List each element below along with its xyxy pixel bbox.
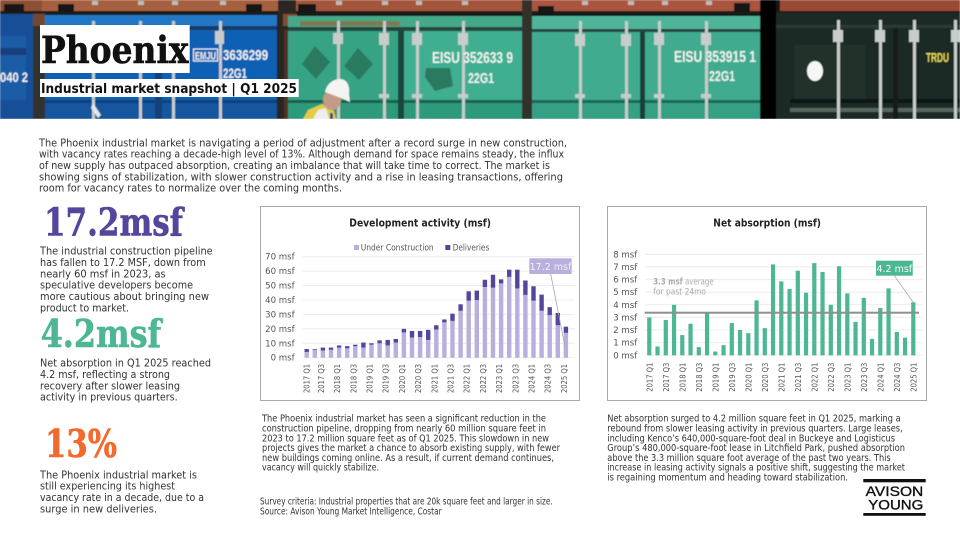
x axis labels: net absorption: 2018 Q1 <box>678 363 687 392</box>
panel: development activity chart <box>260 206 580 400</box>
banner photo: shipping containers: EISU 352633 9 <box>432 50 513 67</box>
banner photo: shipping containers: EISU 353915 1 <box>674 49 756 66</box>
x axis labels: net absorption: 2021 Q1 <box>777 363 786 392</box>
legend: under construction and deliveries: Deliveries <box>453 244 490 254</box>
logo: Avison Young <box>863 479 926 516</box>
x axis labels: net absorption: 2020 Q3 <box>761 363 770 392</box>
annotation: average for past 24mo <box>653 277 714 297</box>
bars: net absorption <box>647 263 915 355</box>
stat: 13%: still experiencing its highest <box>40 480 175 492</box>
callout: 17.2 msf <box>529 258 572 347</box>
x axis labels: net absorption: 2022 Q1 <box>810 363 819 392</box>
text block: net absorption commentary: Group’s 480,000-square-foot lease in Litchfield Park, pushed absorption <box>607 443 905 454</box>
y axis labels: development: 40 msf <box>265 296 296 306</box>
chart title: development activity: Development activity (msf) <box>349 218 491 230</box>
y axis labels: net absorption: 8 msf <box>613 250 638 260</box>
stat: 17.2msf: The industrial construction pipeline <box>39 246 213 258</box>
callout: 4.2 msf: 4.2 msf <box>876 264 913 275</box>
banner photo: shipping containers: 22G1 <box>709 68 735 85</box>
x axis labels: net absorption: 2025 Q1 <box>909 363 918 392</box>
stat: 4.2msf: Net absorption in Q1 2025 reached <box>40 358 211 370</box>
y axis labels: development: 0 msf <box>271 354 296 364</box>
stat: 17.2msf: more cautious about bringing new <box>40 291 209 303</box>
legend: under construction and deliveries: Under Construction <box>361 244 434 254</box>
text block: survey criteria and source: Survey criteria: Industrial properties that are 20k square feet and larger in size. <box>260 496 553 507</box>
intro paragraph: with vacancy rates reaching a decade-high level of 13%. Although demand for space remains steady, the influx <box>39 149 564 161</box>
stat: 4.2msf: activity in previous quarters. <box>40 392 178 404</box>
text block: net absorption commentary: rebound from slower leasing activity in previous quarters. Large leases, <box>607 424 903 434</box>
text block: net absorption commentary: including Kenco’s 640,000-square-foot deal in Buckeye and Logisticus <box>607 433 895 444</box>
x axis labels: development: 2017 Q3 <box>317 364 326 393</box>
stat: 4.2msf: recovery after slower leasing <box>40 380 180 392</box>
text block: survey criteria and source <box>260 496 553 517</box>
y axis labels: development <box>265 253 296 364</box>
y axis labels: development: 10 msf <box>265 339 296 349</box>
x axis labels: net absorption: 2021 Q3 <box>794 363 803 392</box>
intro paragraph: The Phoenix industrial market is navigating a period of adjustment after a record surge in new construction, <box>38 138 567 150</box>
text block: net absorption commentary <box>607 414 905 483</box>
stat: 13%: 13% <box>45 421 117 466</box>
annotation: average for past 24mo: for past 24mo <box>653 287 706 297</box>
x axis labels: development: 2021 Q3 <box>446 364 456 393</box>
text block: development commentary: new buildings coming online. As a result, if current demand continues, <box>262 453 554 464</box>
text block: development commentary <box>261 414 560 474</box>
x axis labels: development: 2023 Q1 <box>495 364 504 393</box>
logo: Avison Young: AVISON <box>866 483 923 499</box>
x axis labels: net absorption: 2023 Q3 <box>860 363 869 392</box>
stat: 13% <box>39 421 204 515</box>
x axis labels: development: 2023 Q3 <box>511 364 520 393</box>
y axis labels: net absorption <box>613 250 638 361</box>
stat: 17.2msf: product to market. <box>40 302 129 314</box>
intro paragraph: room for vacancy rates to normalize over the coming months. <box>39 183 342 195</box>
text block: development commentary: The Phoenix industrial market has seen a significant reduction in the <box>261 414 546 425</box>
x axis labels: net absorption: 2019 Q1 <box>711 363 720 392</box>
y axis labels: net absorption: 0 msf <box>613 351 638 361</box>
y axis labels: net absorption: 1 msf <box>613 339 638 349</box>
x axis labels: development: 2020 Q1 <box>398 364 407 393</box>
text block: survey criteria and source: Source: Avison Young Market Intelligence, Costar <box>260 506 442 517</box>
x axis labels: development: 2024 Q1 <box>528 364 536 393</box>
y axis labels: development: 70 msf <box>265 253 296 263</box>
logo: Avison Young: YOUNG <box>868 496 923 512</box>
y axis labels: net absorption: 2 msf <box>613 326 638 336</box>
x axis labels: development: 2019 Q3 <box>382 364 391 393</box>
x axis labels: net absorption: 2024 Q3 <box>893 363 902 392</box>
stat: 4.2msf <box>40 311 211 404</box>
x axis labels: development: 2022 Q1 <box>463 364 472 393</box>
text block: development commentary: vacancy will quickly stabilize. <box>262 462 379 474</box>
callout: 17.2 msf: 17.2 msf <box>530 262 572 273</box>
x axis labels: development: 2021 Q1 <box>430 364 439 393</box>
x axis labels: development: 2024 Q3 <box>544 364 553 393</box>
y axis labels: net absorption: 6 msf <box>613 276 638 286</box>
banner photo: shipping containers <box>0 0 960 121</box>
x axis labels: development: 2025 Q1 <box>560 364 569 393</box>
average line: 3.3 msf <box>645 312 919 314</box>
y axis labels: net absorption: 3 msf <box>613 313 638 323</box>
chart title: net absorption: Net absorption (msf) <box>713 218 821 230</box>
text block: development commentary: construction pipeline, dropping from nearly 60 million square feet in <box>262 424 546 434</box>
subtitle: Industrial market snapshot | Q1 2025 <box>41 81 297 97</box>
text block: net absorption commentary: is regaining momentum and heading toward stabilization. <box>607 472 848 483</box>
y axis labels: development: 20 msf <box>265 325 296 335</box>
banner photo: shipping containers: 040 2 <box>0 69 28 85</box>
text block: net absorption commentary: above the 3.3 million square foot average of the past two years. This <box>607 453 891 464</box>
banner photo: shipping containers: EMJU <box>195 50 216 62</box>
callout: 4.2 msf <box>876 261 913 302</box>
stacked bars: under construction and deliveries <box>304 270 568 358</box>
text block: net absorption commentary: increase in leasing activity signals a positive shift, suggesting the market <box>607 463 905 474</box>
legend: under construction and deliveries <box>354 244 490 254</box>
x axis labels: development: 2022 Q3 <box>479 364 488 393</box>
x axis labels: development: 2018 Q1 <box>333 364 342 393</box>
stat: 4.2msf: 4.2 msf, reflecting a strong <box>40 369 170 381</box>
intro paragraph: showing signs of stabilization, with slower construction activity and a rise in leasing transactions, offering <box>39 171 563 183</box>
x axis labels: net absorption: 2023 Q1 <box>843 363 852 392</box>
banner photo: shipping containers: 22G1 <box>468 70 494 87</box>
y axis labels: net absorption: 7 msf <box>613 263 638 273</box>
stat: 13%: surge in new deliveries. <box>40 503 157 515</box>
stat: 17.2msf: speculative developers become <box>40 280 193 292</box>
stat: 13%: The Phoenix industrial market is <box>39 469 197 481</box>
x axis labels: net absorption: 2018 Q3 <box>695 363 704 392</box>
intro paragraph: of new supply has outpaced absorption, creating an imbalance that will take time to correct. The market is <box>39 160 550 172</box>
stat: 4.2msf: 4.2msf <box>41 311 163 356</box>
text block: net absorption commentary: Net absorption surged to 4.2 million square feet in Q1 2025, marking a <box>607 414 901 425</box>
intro paragraph <box>38 138 567 195</box>
y axis labels: net absorption: 4 msf <box>613 301 638 311</box>
title: Phoenix: Phoenix <box>41 28 189 72</box>
text block: development commentary: projects gives the market a chance to absorb existing supply, with fewer <box>262 443 560 454</box>
x axis labels: development: 2017 Q1 <box>303 364 312 393</box>
banner photo: shipping containers: 3636299 <box>223 47 268 64</box>
y axis labels: development: 30 msf <box>265 310 296 320</box>
x axis labels: development: 2019 Q1 <box>366 364 374 393</box>
stat: 17.2msf: nearly 60 msf in 2023, as <box>40 268 166 280</box>
x axis labels: net absorption: 2019 Q3 <box>728 363 737 392</box>
x axis labels: net absorption: 2020 Q1 <box>744 363 753 392</box>
stat: 17.2msf: has fallen to 17.2 MSF, down from <box>40 257 206 269</box>
y axis labels: development: 60 msf <box>265 267 296 277</box>
x axis labels: net absorption: 2022 Q3 <box>827 363 836 392</box>
stat: 17.2msf: 17.2msf <box>44 200 185 244</box>
stat: 17.2msf <box>39 200 213 314</box>
y axis labels: development: 50 msf <box>265 282 296 292</box>
annotation: average for past 24mo: 3.3 msf average <box>653 277 714 287</box>
banner photo: shipping containers: 22G1 <box>223 65 247 81</box>
stat: 13%: vacancy rate in a decade, due to a <box>40 492 204 504</box>
x axis labels: net absorption: 2024 Q1 <box>876 363 885 392</box>
x axis labels: net absorption: 2017 Q1 <box>645 363 654 392</box>
x axis labels: development: 2018 Q3 <box>349 364 358 393</box>
x axis labels: net absorption: 2017 Q3 <box>662 363 671 392</box>
panel: net absorption chart <box>608 206 926 400</box>
x axis labels: development <box>303 364 569 393</box>
x axis labels: net absorption <box>645 363 918 392</box>
x axis labels: development: 2020 Q3 <box>414 364 423 393</box>
y axis labels: net absorption: 5 msf <box>613 288 638 298</box>
text block: development commentary: 2023 to 17.2 million square feet as of Q1 2025. This slowdown in new <box>262 434 549 444</box>
